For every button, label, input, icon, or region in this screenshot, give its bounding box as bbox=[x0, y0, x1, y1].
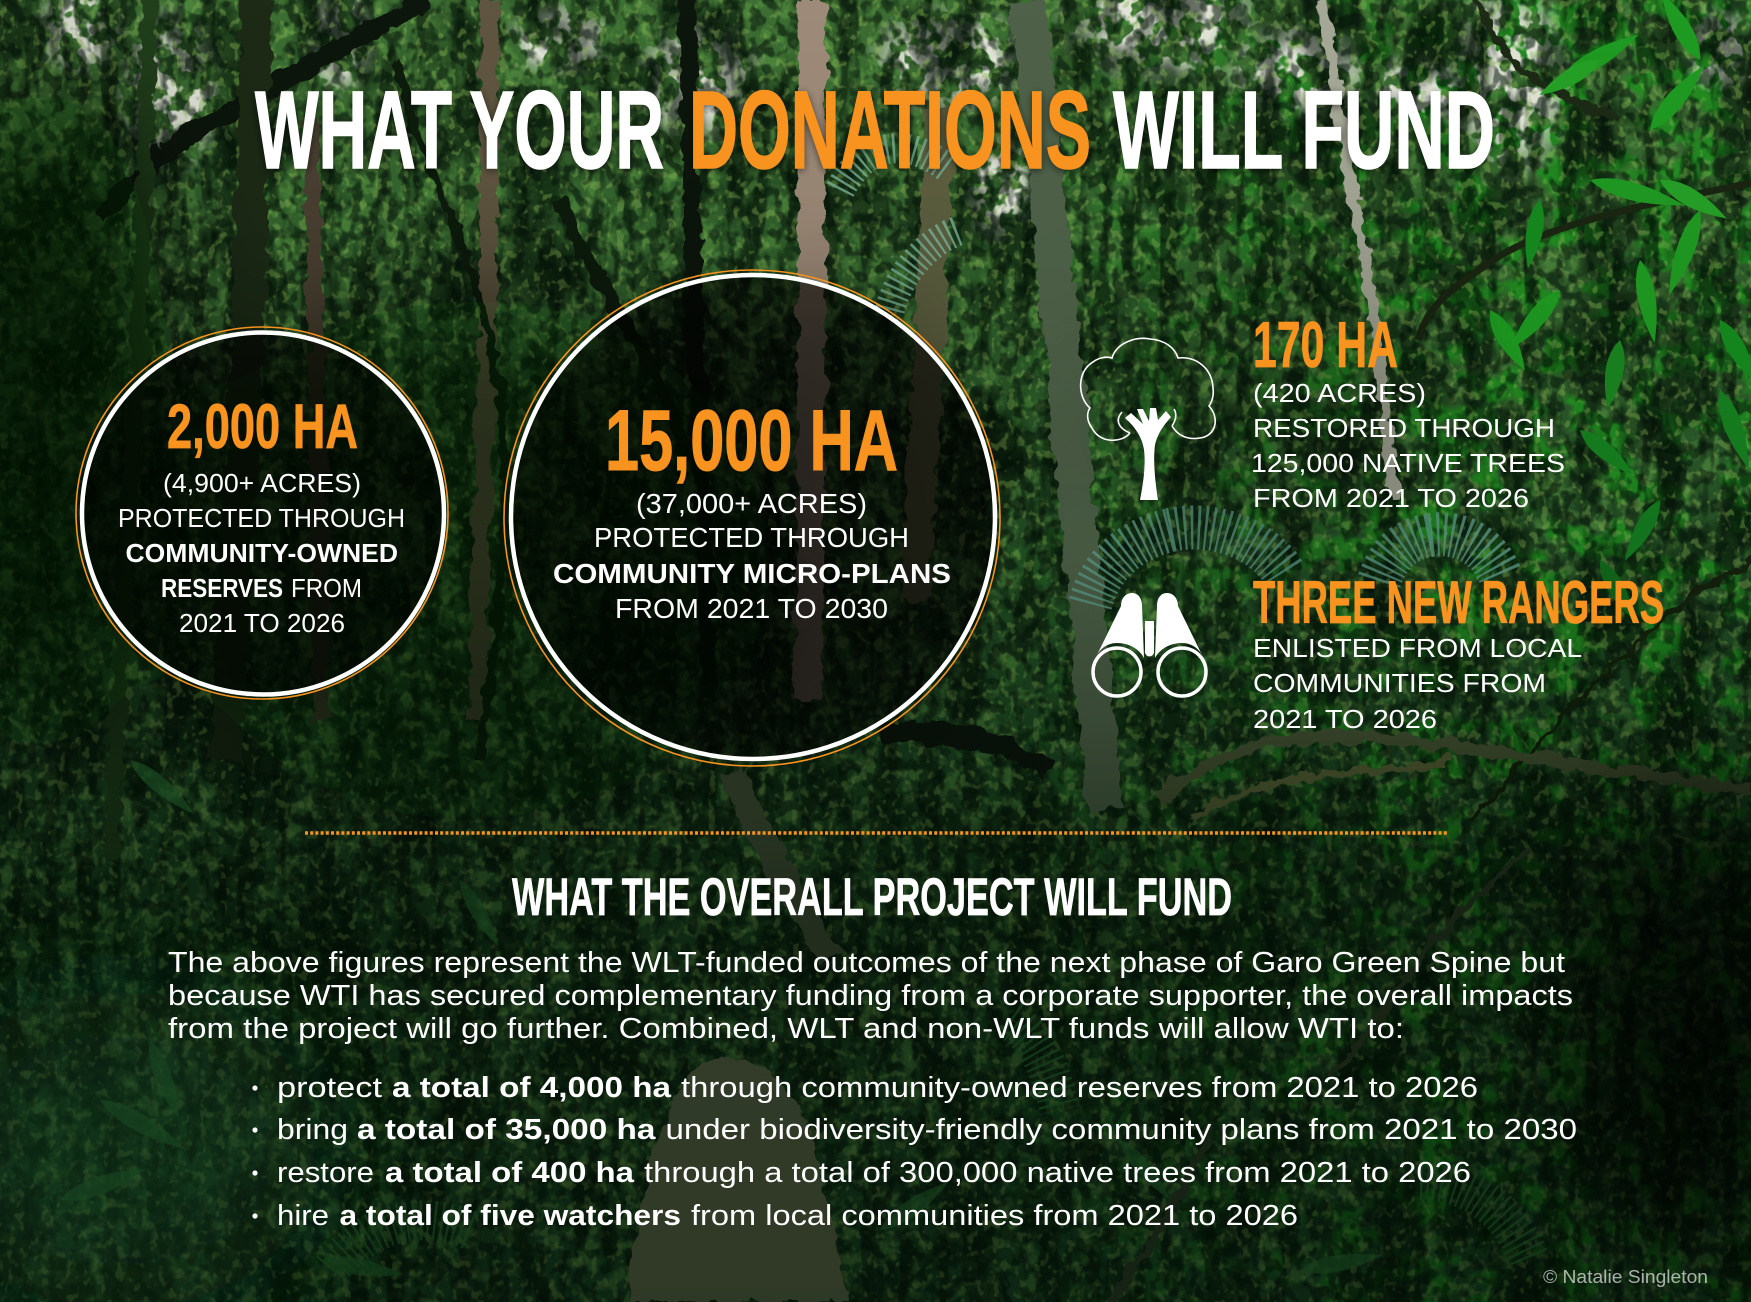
title: WILL FUND bbox=[1113, 69, 1495, 192]
text: 170 ha restored: FROM 2021 TO 2026 bbox=[1253, 485, 1529, 513]
text: 170 ha restored: 125,000 NATIVE TREES bbox=[1251, 450, 1565, 478]
bullet list: overall impacts: through a total of 300,000 native trees from 2021 to 2026 bbox=[644, 1157, 1471, 1189]
text: three new rangers: ENLISTED FROM LOCAL bbox=[1253, 635, 1582, 663]
bullet list: overall impacts: a total of 4,000 ha bbox=[392, 1072, 672, 1104]
tonal shaping bbox=[0, 80, 1450, 820]
text block: overall project intro bbox=[168, 947, 1573, 1045]
description: reserves: COMMUNITY-OWNED bbox=[126, 540, 398, 568]
text: 170 ha restored: (420 ACRES) bbox=[1253, 380, 1426, 408]
bullet list: overall impacts: a total of five watchers bbox=[340, 1200, 681, 1232]
bullet list: overall impacts bbox=[252, 1072, 1577, 1232]
text: 170 ha restored bbox=[1251, 308, 1565, 513]
text: 170 ha restored: 170 HA bbox=[1253, 308, 1398, 381]
title bbox=[255, 69, 1495, 192]
description: reserves bbox=[118, 470, 405, 638]
bullet list: overall impacts: restore bbox=[277, 1157, 374, 1189]
description: reserves: 2021 TO 2026 bbox=[179, 610, 345, 638]
description: reserves: (4,900+ ACRES) bbox=[163, 470, 361, 498]
description: micro-plans: PROTECTED THROUGH bbox=[594, 522, 909, 553]
text block: overall project intro: from the project will go further. Combined, WLT and non-WLT funds will allow WTI to: bbox=[168, 1013, 1404, 1045]
bullet list: overall impacts: bring bbox=[277, 1114, 348, 1146]
fallen log bbox=[630, 1058, 850, 1302]
palm fronds bbox=[330, 148, 1530, 1270]
bullet list: overall impacts: from local communities from 2021 to 2026 bbox=[691, 1200, 1298, 1232]
text: three new rangers: 2021 TO 2026 bbox=[1253, 706, 1437, 734]
title: WHAT YOUR bbox=[255, 69, 664, 192]
stat: 2,000 ha: 2,000 HA bbox=[167, 392, 358, 462]
bullet list: overall impacts: a total of 400 ha bbox=[385, 1157, 635, 1189]
description: micro-plans: FROM 2021 TO 2030 bbox=[615, 593, 888, 624]
text block: overall project intro: The above figures represent the WLT-funded outcomes of the next phase of Garo Green Spine but bbox=[168, 947, 1565, 979]
icon: tree bbox=[1081, 338, 1215, 500]
text: 170 ha restored: RESTORED THROUGH bbox=[1253, 415, 1555, 443]
stat: 15,000 ha: 15,000 HA bbox=[605, 393, 898, 489]
description: reserves: RESERVES bbox=[161, 575, 283, 603]
bullet list: overall impacts: hire bbox=[277, 1200, 329, 1232]
text: three new rangers bbox=[1253, 569, 1664, 734]
bullet list: overall impacts: under biodiversity-friendly community plans from 2021 to 2030 bbox=[666, 1114, 1577, 1146]
text: three new rangers: COMMUNITIES FROM bbox=[1253, 670, 1546, 698]
bullet list: overall impacts: through community-owned reserves from 2021 to 2026 bbox=[681, 1072, 1478, 1104]
description: reserves: PROTECTED THROUGH bbox=[118, 505, 405, 533]
description: micro-plans bbox=[553, 488, 951, 624]
photo credit: © Natalie Singleton bbox=[1543, 1267, 1708, 1287]
description: reserves: FROM bbox=[291, 575, 362, 603]
title: DONATIONS bbox=[689, 69, 1091, 192]
description: micro-plans: (37,000+ ACRES) bbox=[636, 488, 867, 519]
panel: community-owned reserves circle bbox=[76, 327, 448, 699]
bullet list: overall impacts: protect bbox=[277, 1072, 382, 1104]
text block: overall project intro: because WTI has secured complementary funding from a corporate supporter, the overall impacts bbox=[168, 980, 1573, 1012]
description: micro-plans: COMMUNITY MICRO-PLANS bbox=[553, 558, 951, 589]
heading: what the overall project will fund: WHAT THE OVERALL PROJECT WILL FUND bbox=[512, 868, 1232, 927]
panel: community micro-plans circle bbox=[504, 270, 1000, 766]
broad leaves bbox=[1482, 0, 1751, 625]
bullet list: overall impacts: a total of 35,000 ha bbox=[357, 1114, 656, 1146]
icon: binoculars bbox=[1093, 593, 1206, 696]
